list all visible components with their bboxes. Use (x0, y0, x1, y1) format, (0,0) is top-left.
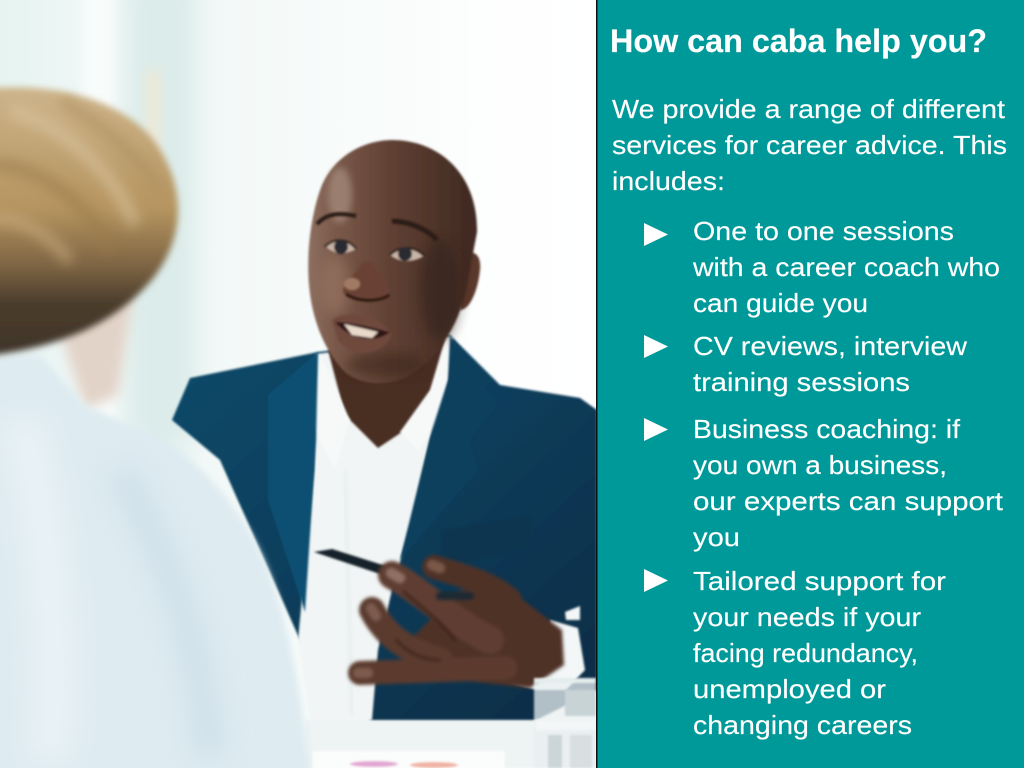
man: white shirt (298, 336, 453, 720)
bullet: CV reviews: training sessions (693, 367, 910, 397)
text block: intro: services for career advice. This (612, 130, 1007, 160)
bullet: CV reviews (644, 331, 967, 397)
heading: How can caba help you? (610, 23, 987, 59)
water glass (534, 678, 596, 768)
bullet: tailored support: facing redundancy, (693, 638, 918, 668)
bullet: business coaching: Business coaching: if (693, 414, 961, 444)
man: jacket lapels (268, 334, 457, 612)
icon: arrow (644, 223, 668, 246)
bullet: career coach: can guide you (693, 288, 868, 318)
icon: arrow (644, 418, 668, 441)
gap between arm and body (565, 606, 580, 620)
shirt: shading and placket (345, 470, 352, 715)
bullet: CV reviews: CV reviews, interview (693, 331, 967, 361)
text block: intro: includes: (612, 166, 725, 196)
shirt collar (314, 336, 450, 436)
icon: arrow (644, 569, 668, 592)
man: pen (314, 547, 386, 575)
woman: neck (60, 290, 134, 410)
bullet: business coaching: you (693, 522, 740, 552)
bullet: business coaching: you own a business, (693, 450, 947, 480)
bullet: tailored support: unemployed or (693, 674, 886, 704)
bullet: tailored support: your needs if your (693, 602, 921, 632)
bullet: tailored support: changing careers (693, 710, 912, 740)
bullet: career coach: with a career coach who (692, 252, 1000, 282)
woman: shirt folds (20, 420, 210, 760)
text block: intro: We provide a range of different (612, 94, 1006, 124)
bullet: business coaching (644, 414, 1004, 552)
man: jacket (172, 335, 597, 722)
man: ear (460, 253, 480, 310)
man: gesturing hand (358, 565, 564, 688)
icon: arrow (644, 335, 668, 358)
desk: paper and coloured chart (312, 751, 505, 768)
man: neck (328, 340, 448, 448)
woman: blurred shirt (0, 355, 312, 768)
man: forehead highlight (328, 167, 352, 223)
woman: hair highlights (0, 100, 160, 262)
bullet: business coaching: our experts can support (693, 486, 1004, 516)
man: cuff (508, 620, 585, 690)
bullet: tailored support: Tailored support for (693, 566, 946, 596)
bullet: tailored support (644, 566, 946, 740)
man: head (308, 140, 477, 383)
bullet: career coach (644, 216, 1000, 318)
man: cheek shading (319, 255, 349, 315)
desk (305, 720, 597, 768)
panel: teal text column (596, 0, 1024, 768)
bullet: career coach: One to one sessions (693, 216, 954, 246)
man: brows, eyes, nose, mouth (317, 214, 437, 353)
photo: man talking to a woman across a desk (0, 0, 597, 768)
text block: intro (612, 94, 1007, 196)
woman: blonde hair (0, 87, 178, 358)
photo background: bright office windows (0, 0, 326, 718)
